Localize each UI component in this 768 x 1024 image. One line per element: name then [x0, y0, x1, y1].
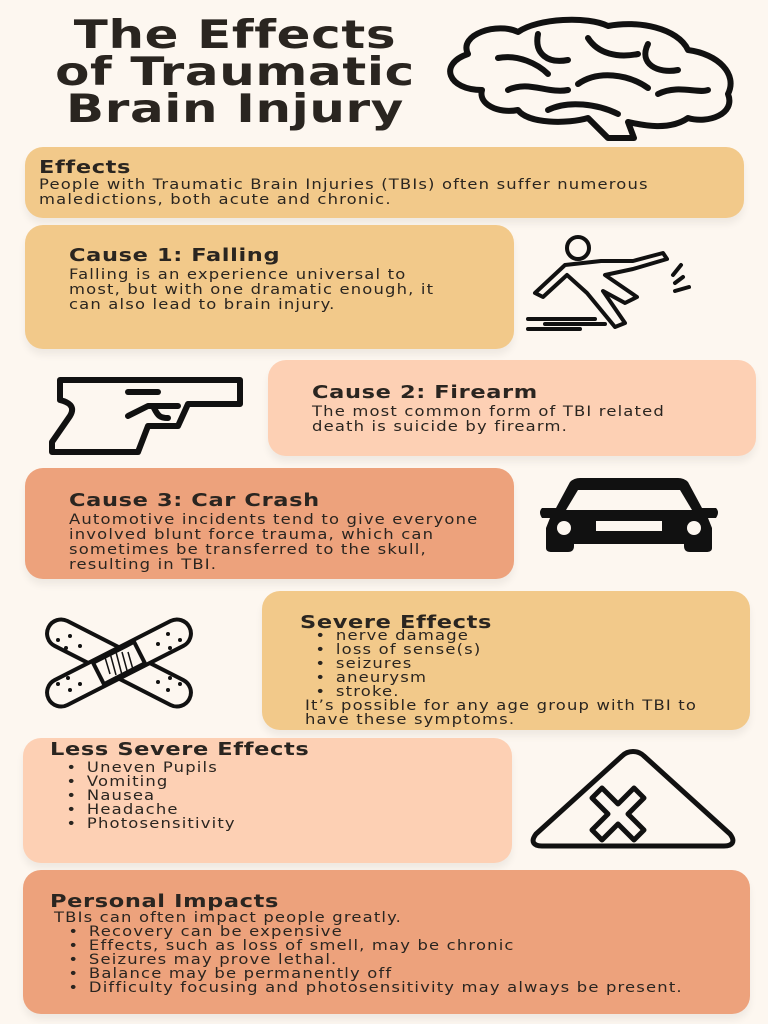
heading: severe effects: Severe Effects [300, 612, 492, 633]
list: personal impacts: Effects, such as loss of smell, may be chronic [89, 938, 515, 954]
panel: severe effects [262, 591, 750, 730]
heading: cause 2: Cause 2: Firearm [312, 382, 538, 403]
text: cause 1 [69, 267, 434, 313]
list: less severe: • [66, 802, 77, 818]
list: less severe: Headache [87, 802, 179, 818]
list: less severe: Photosensitivity [87, 816, 236, 832]
text: cause 2 [312, 404, 665, 435]
list: severe effects: nerve damage [336, 628, 469, 644]
list: personal impacts: • [68, 924, 79, 940]
panel: cause 2 [268, 360, 756, 456]
list: personal impacts: Difficulty focusing and photosensitivity may always be present. [89, 980, 683, 996]
text: cause 1: can also lead to brain injury. [69, 297, 335, 313]
text: effects: People with Traumatic Brain Injuries (TBIs) often suffer numerous [39, 177, 649, 193]
icon: falling person [526, 235, 691, 331]
list: personal impacts: • [68, 938, 79, 954]
panel: personal impacts [23, 870, 750, 1014]
text: personal intro: TBIs can often impact people greatly. [54, 910, 402, 926]
list: personal impacts [68, 924, 683, 996]
text: cause 3: sometimes be transferred to the skull, [69, 542, 427, 558]
list: severe effects: • [315, 670, 326, 686]
icon: gun [49, 377, 243, 455]
list: severe effects: • [315, 656, 326, 672]
list: personal impacts: Recovery can be expensive [89, 924, 343, 940]
text: effects: maledictions, both acute and chronic. [39, 192, 392, 208]
panel: effects [25, 147, 744, 218]
list: severe effects: loss of sense(s) [336, 642, 481, 658]
text: cause 2: death is suicide by firearm. [312, 419, 568, 435]
panel: less severe effects [23, 738, 512, 863]
list: personal impacts: • [68, 980, 79, 996]
list: less severe: • [66, 788, 77, 804]
list: personal impacts: • [68, 952, 79, 968]
list: severe effects [315, 628, 481, 700]
text: severe note: have these symptoms. [305, 712, 515, 728]
list: severe effects: • [315, 684, 326, 700]
list: less severe: • [66, 816, 77, 832]
title: The Effects [74, 13, 396, 58]
list: severe effects: • [315, 628, 326, 644]
list: severe effects: • [315, 642, 326, 658]
text: cause 3: resulting in TBI. [69, 557, 217, 573]
panel: cause 1 [25, 225, 514, 349]
list: less severe: Nausea [87, 788, 155, 804]
list: less severe: • [66, 774, 77, 790]
text: cause 1: most, but with one dramatic enough, it [69, 282, 434, 298]
title: of Traumatic [55, 50, 415, 95]
list: personal impacts: Seizures may prove lethal. [89, 952, 337, 968]
icon: bandages [45, 618, 193, 708]
text: severe note: It’s possible for any age group with TBI to [305, 698, 697, 714]
heading: effects: Effects [39, 157, 131, 178]
icon: car [540, 478, 718, 552]
list: less severe: Uneven Pupils [87, 760, 218, 776]
title: Brain Injury [66, 87, 404, 132]
text: cause 3: involved blunt force trauma, which can [69, 527, 434, 543]
text: cause 2: The most common form of TBI related [312, 404, 665, 420]
list: severe effects: seizures [336, 656, 412, 672]
list: severe effects: aneurysm [336, 670, 427, 686]
panel: cause 3 [25, 468, 514, 579]
list: personal impacts: • [68, 966, 79, 982]
text: cause 1: Falling is an experience universal to [69, 267, 406, 283]
heading: personal impacts: Personal Impacts [50, 891, 279, 912]
list: less severe: Vomiting [87, 774, 169, 790]
text: effects [39, 177, 649, 208]
list: personal impacts: Balance may be permanently off [89, 966, 392, 982]
list: severe effects: stroke. [336, 684, 400, 700]
text: cause 3 [69, 512, 478, 573]
heading: less severe: Less Severe Effects [50, 739, 309, 760]
icon: brain [447, 16, 734, 141]
icon: warning triangle [530, 749, 736, 848]
list: less severe [66, 760, 236, 832]
heading: cause 3: Cause 3: Car Crash [69, 490, 320, 511]
text: severe note [305, 698, 697, 728]
title [55, 13, 415, 132]
text: cause 3: Automotive incidents tend to give everyone [69, 512, 478, 528]
list: less severe: • [66, 760, 77, 776]
heading: cause 1: Cause 1: Falling [69, 245, 280, 266]
